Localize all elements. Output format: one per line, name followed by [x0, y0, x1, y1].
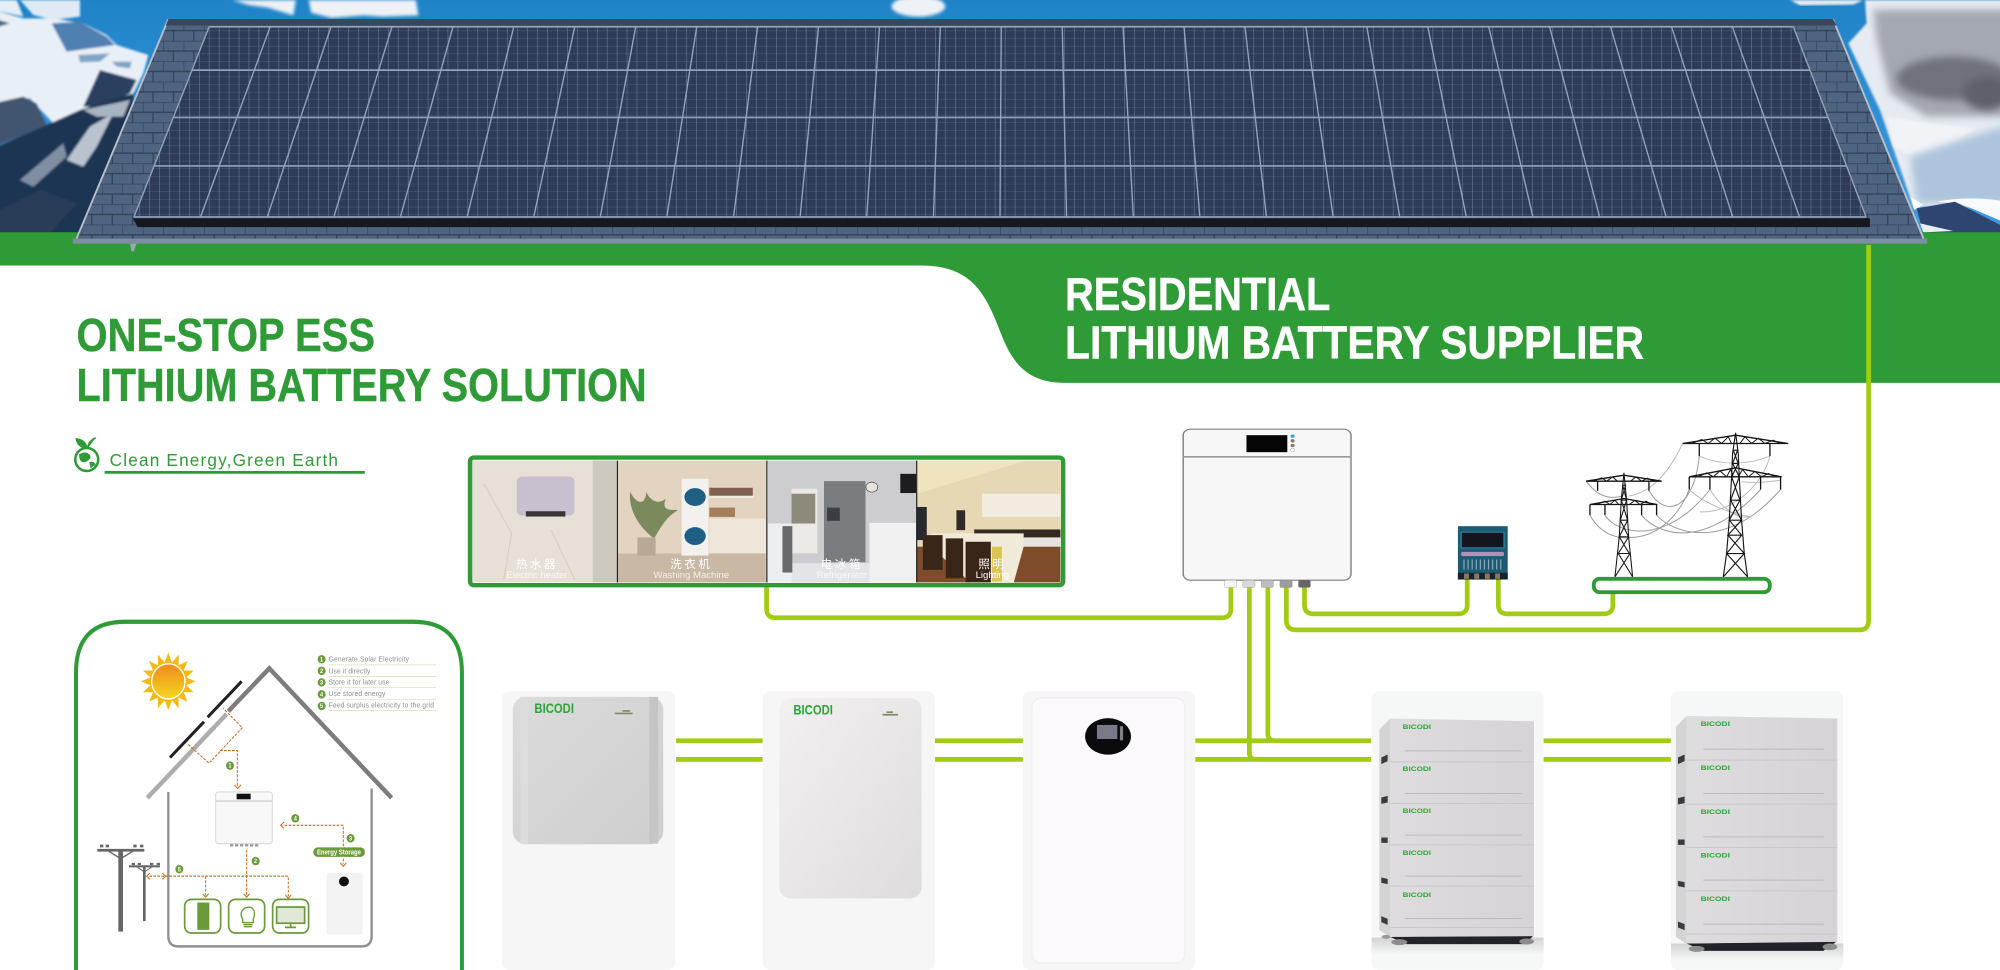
house outline — [147, 668, 392, 946]
energy flow arrows — [147, 708, 346, 898]
inverter and meter — [1183, 429, 1508, 588]
legend: 1 — [320, 657, 324, 663]
photo: washing machine — [618, 461, 766, 582]
legend: Store it for later use — [329, 679, 389, 687]
card: stacked battery B: BICODI — [1701, 853, 1730, 860]
power wires — [1587, 443, 1781, 538]
card: stacked battery B: BICODI — [1701, 809, 1730, 816]
roof tiles — [77, 19, 1923, 239]
captions: Refrigerator — [817, 570, 868, 581]
legend: Use stored energy — [329, 691, 386, 698]
card: wall battery 1: BICODI — [534, 701, 574, 716]
legend: 3 — [320, 680, 324, 687]
flow step numbers: 1 — [228, 764, 232, 770]
flow step numbers: 2 — [254, 859, 257, 865]
icon: refrigerator — [185, 899, 221, 933]
ridge — [166, 19, 1837, 26]
heading: one-stop: ONE-STOP ESS — [77, 309, 375, 361]
photo: refrigerator — [768, 461, 916, 582]
legend — [318, 655, 437, 711]
card: stacked battery A: BICODI — [1403, 850, 1431, 857]
home battery — [327, 873, 363, 934]
inverter — [1183, 429, 1351, 588]
legend: 2 — [320, 669, 323, 675]
card: stacked battery B: BICODI — [1701, 765, 1730, 772]
card: stacked battery A: BICODI — [1403, 892, 1431, 899]
slogan — [75, 438, 365, 474]
panel frame — [470, 458, 1063, 585]
legend: 4 — [320, 692, 324, 699]
right clouds and mountain — [1790, 0, 2000, 233]
mounting rail shadow — [133, 218, 1870, 227]
heading: one-stop — [77, 309, 647, 411]
connection cables — [676, 245, 1869, 759]
legend: Use it directly — [329, 668, 371, 675]
solar panels — [134, 27, 1866, 217]
electric meter — [1458, 526, 1508, 580]
pylon small — [1586, 473, 1662, 577]
captions: 电冰箱 — [821, 557, 863, 571]
panel border — [76, 622, 462, 970]
left snowy mountain — [0, 0, 148, 240]
roof edges — [77, 19, 1923, 239]
panel: appliance photos — [470, 458, 1063, 585]
energy storage label: Energy Storage — [317, 848, 361, 856]
captions: 照明 — [978, 558, 1006, 571]
flow step numbers: 4 — [294, 816, 298, 822]
card: display battery — [1023, 691, 1195, 970]
captions: Washing Machine — [654, 570, 729, 581]
flow step numbers: 3 — [349, 836, 353, 842]
card: wall battery 2 — [763, 691, 935, 970]
heading: residential: LITHIUM BATTERY SUPPLIER — [1065, 317, 1644, 369]
utility poles — [97, 845, 160, 932]
flow step numbers: 5 — [178, 867, 182, 873]
icon: monitor — [273, 899, 309, 933]
card: stacked battery A — [1372, 691, 1544, 970]
downspouts — [130, 244, 136, 251]
green band and banner — [0, 232, 2000, 383]
heading: residential — [1065, 268, 1644, 369]
heading: residential: RESIDENTIAL — [1065, 268, 1330, 320]
captions: Lighting — [976, 570, 1009, 581]
captions: Electric heater — [506, 570, 568, 581]
card: stacked battery B: BICODI — [1701, 721, 1730, 728]
roof with solar array — [73, 19, 1927, 251]
solar panels on roof — [170, 681, 242, 758]
grid bus bar — [1594, 579, 1770, 592]
photo: lighting kitchen — [917, 461, 1060, 582]
pylon large — [1683, 433, 1788, 577]
card: stacked battery B: BICODI — [1701, 896, 1730, 903]
flow step numbers — [175, 761, 355, 873]
legend: 5 — [320, 704, 324, 710]
card: wall battery 2: BICODI — [793, 703, 833, 718]
card: stacked battery A: BICODI — [1403, 766, 1431, 773]
captions: 热水器 — [516, 558, 558, 571]
power pylons — [1586, 433, 1788, 577]
card: stacked battery A: BICODI — [1403, 808, 1431, 815]
home inverter — [216, 792, 272, 845]
top clouds — [232, 0, 945, 18]
legend: Feed surplus electricity to the grid — [329, 702, 434, 709]
card: stacked battery B — [1671, 691, 1843, 970]
icon: light bulb — [229, 899, 265, 933]
card: wall battery 1 — [502, 691, 675, 970]
panel: home energy diagram — [76, 622, 462, 970]
legend: Generate Solar Electricity — [329, 657, 410, 664]
photo: electric heater — [472, 461, 617, 582]
card: stacked battery A: BICODI — [1403, 724, 1431, 731]
captions — [506, 557, 1009, 581]
battery products — [502, 691, 1843, 970]
eaves gutter — [73, 239, 1927, 244]
heading: one-stop: LITHIUM BATTERY SOLUTION — [77, 359, 647, 411]
icon: green globe — [75, 438, 98, 471]
slogan: Clean Energy,Green Earth — [110, 450, 338, 470]
icon: sun — [141, 653, 196, 710]
captions: 洗衣机 — [670, 557, 712, 571]
background sky — [0, 0, 2000, 234]
